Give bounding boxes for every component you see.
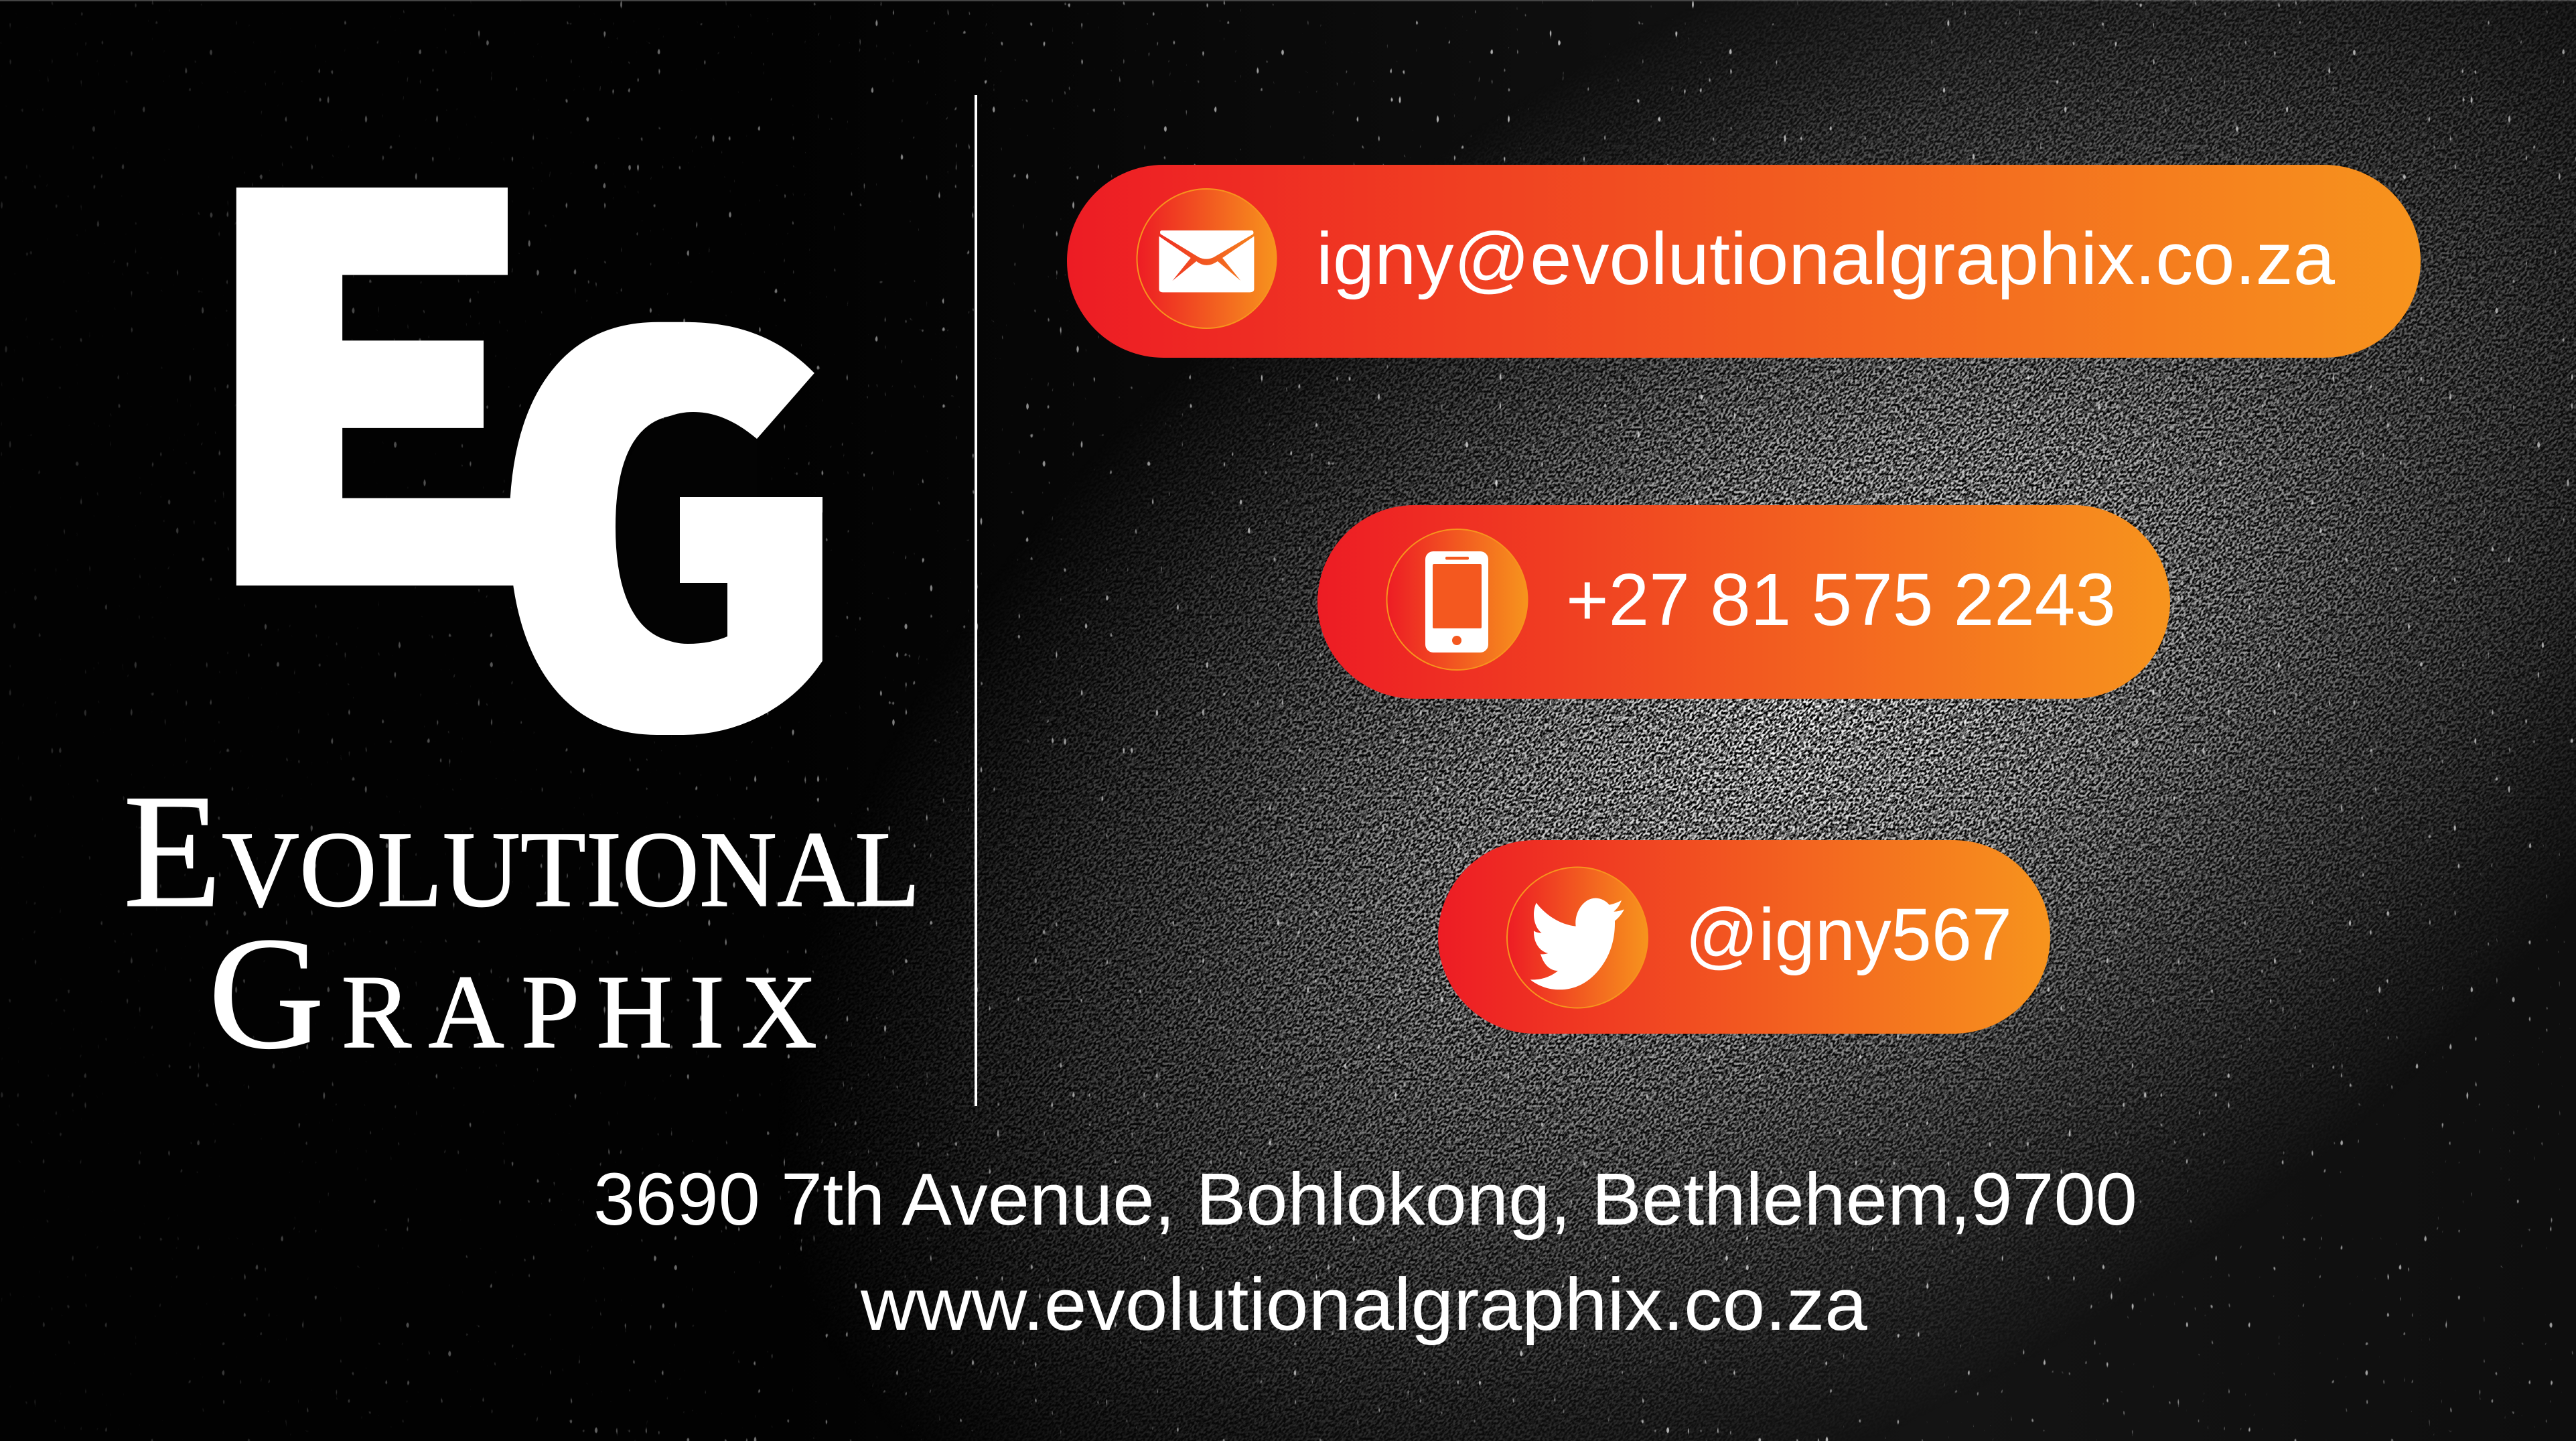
street address: 3690 7th Avenue, Bohlokong, Bethlehem,9700	[593, 1158, 2137, 1241]
contact pill: email	[1067, 165, 2421, 358]
vertical divider	[975, 95, 977, 1106]
logo mark: EG monogram: E	[230, 84, 515, 686]
logo wordmark: Evolutional Graphix: GRAPHIX	[208, 904, 817, 1082]
logo mark: EG monogram: G	[518, 226, 822, 828]
twitter handle: @igny567	[1685, 894, 2012, 976]
contact pill: phone	[1317, 505, 2170, 699]
logo wordmark: Evolutional Graphix: EVOLUTIONAL	[123, 760, 920, 941]
email address: igny@evolutionalgraphix.co.za	[1316, 218, 2336, 300]
icon: smartphone	[1386, 529, 1527, 670]
website: www.evolutionalgraphix.co.za	[860, 1263, 1868, 1346]
logo mark: EG monogram	[230, 84, 822, 828]
icon: envelope	[1137, 189, 1277, 328]
logo wordmark: Evolutional Graphix	[123, 760, 920, 1082]
icon: bird	[1507, 867, 1648, 1008]
phone number: +27 81 575 2243	[1566, 559, 2116, 641]
contact pill: twitter	[1438, 840, 2050, 1034]
